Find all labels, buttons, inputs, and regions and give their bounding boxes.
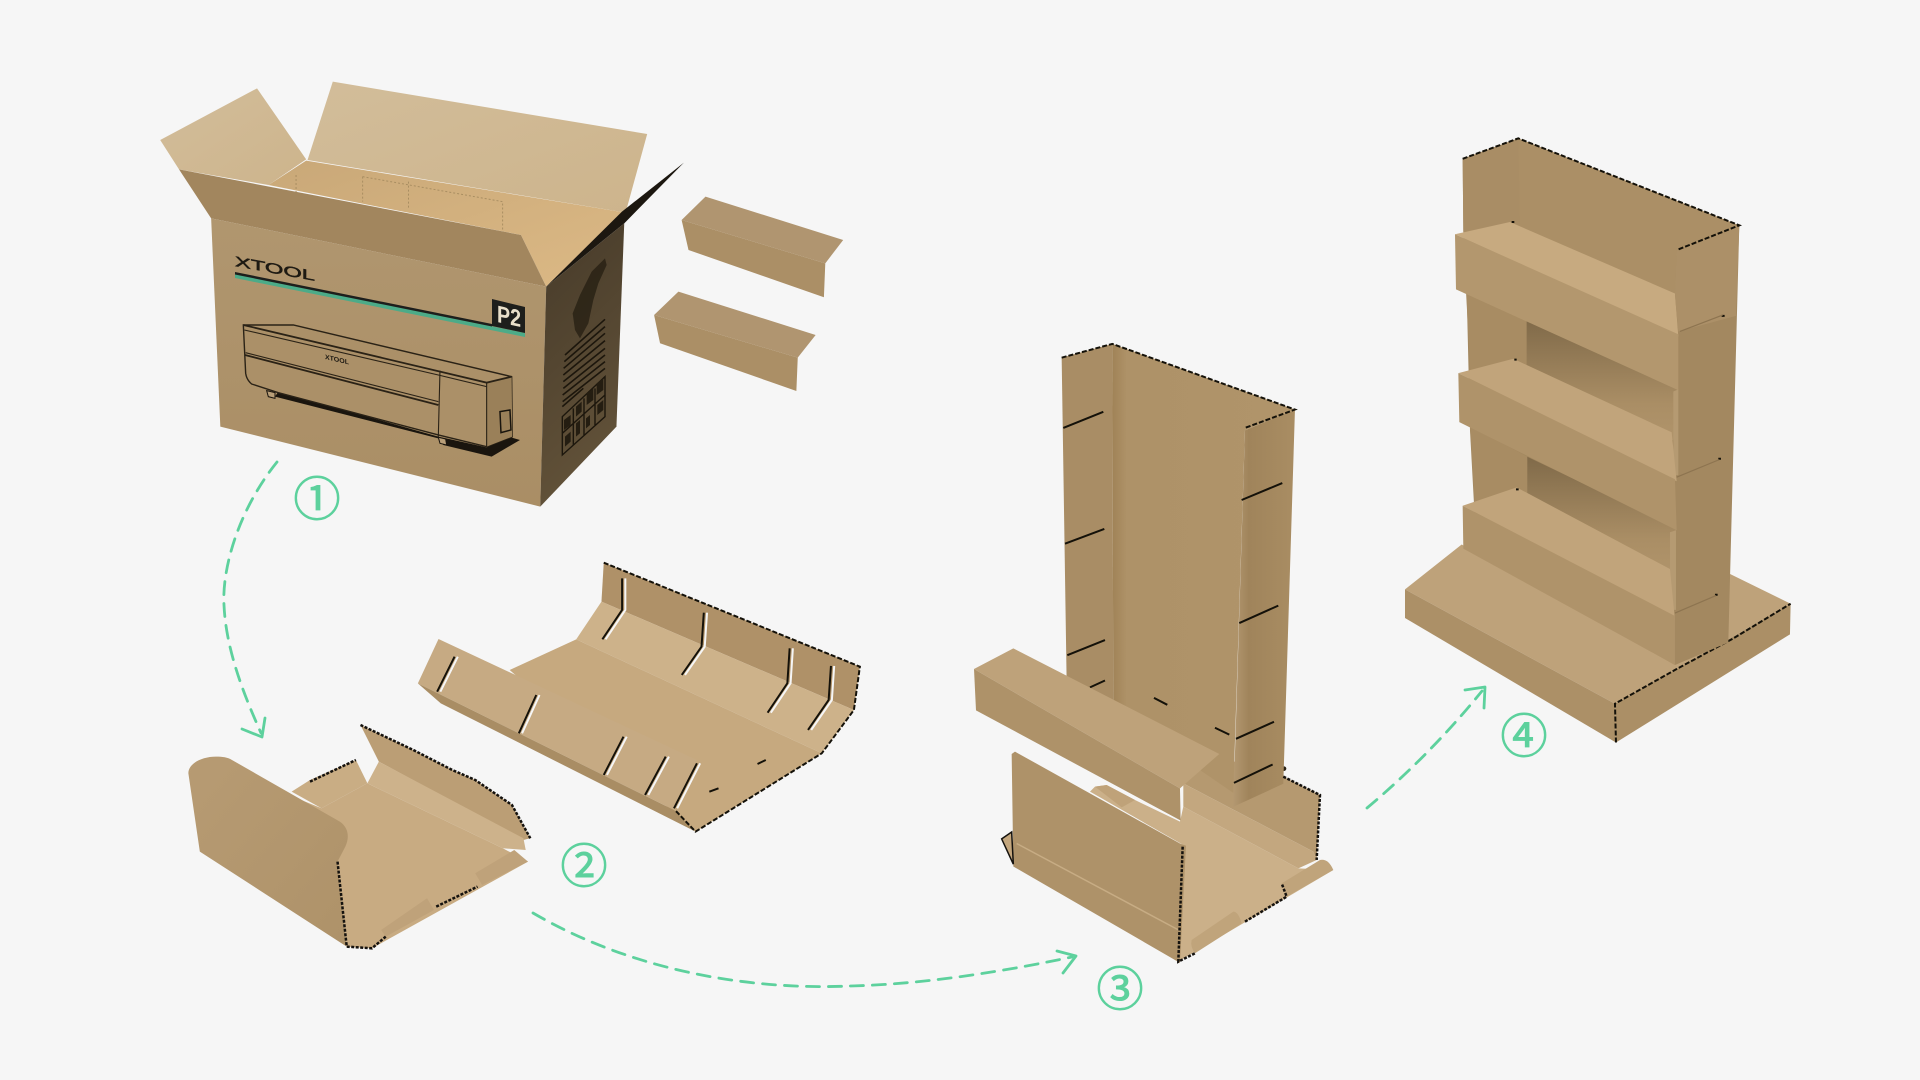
- arrow head: [1465, 687, 1485, 708]
- back panel low: [1527, 457, 1677, 575]
- tray tabs and edges: [1178, 777, 1333, 962]
- step 4: finished shelf stand: [1405, 138, 1791, 743]
- step number 1: ①: [294, 473, 340, 526]
- lower guard front: [654, 315, 798, 391]
- printer feet: [267, 391, 447, 445]
- printer thin crease: [244, 330, 487, 387]
- upper guard top: [682, 197, 843, 263]
- box front face: [211, 218, 546, 507]
- step 3: insert being assembled: [974, 344, 1333, 963]
- side print text rows: [562, 319, 605, 407]
- shelf 1 top: [1455, 222, 1678, 336]
- right wall lower band: [367, 762, 526, 850]
- arrow head: [1057, 951, 1076, 973]
- base right: [1615, 604, 1791, 743]
- tray back wall: [601, 563, 860, 710]
- printer top crease: [243, 325, 512, 383]
- base top: [1405, 545, 1791, 704]
- printer mark: XTOOL: [325, 354, 349, 367]
- rear corner knob: [1282, 766, 1286, 771]
- left column low: [1470, 426, 1527, 508]
- tray floor: [285, 783, 528, 948]
- tray corrugated edges: [1178, 777, 1320, 962]
- tray base: [510, 639, 822, 832]
- side print icons: [564, 378, 603, 447]
- side print icon grid: [562, 377, 605, 455]
- box left inner flap: [160, 88, 306, 185]
- tray black edges: [604, 563, 860, 832]
- box front flap: [179, 169, 546, 287]
- step number 3: ③: [1096, 963, 1144, 1016]
- wing lip 2: [1673, 389, 1678, 475]
- tall piece corrugated edges: [1062, 344, 1295, 428]
- front tab A: [381, 898, 434, 937]
- shelf slots: [1512, 222, 1725, 595]
- interior crease marks: [296, 175, 503, 233]
- lower tray wall fold: [1017, 843, 1180, 931]
- printer module edges: [438, 371, 487, 447]
- front tab B: [475, 850, 528, 885]
- back panel mid: [1527, 320, 1677, 440]
- tall piece slits: [1063, 412, 1282, 783]
- printer line drawing: [243, 325, 520, 457]
- top corrugated edge: [1463, 138, 1739, 250]
- arrow: step 1 to 2: [224, 462, 277, 737]
- back panel top: [1518, 138, 1739, 302]
- back small wall: [292, 760, 367, 808]
- base front: [1405, 589, 1616, 743]
- step 2: flat insert (upper tray): [418, 563, 860, 832]
- rear backing: [1463, 138, 1739, 665]
- arrow line: [1367, 691, 1482, 808]
- tall piece and front pieces: [974, 344, 1295, 963]
- arrow line: [224, 462, 277, 733]
- left upright: [1463, 138, 1523, 238]
- step number 2: ②: [560, 840, 608, 893]
- box interior: [269, 161, 626, 287]
- wing lip 3: [1670, 530, 1676, 610]
- tab right: [1282, 860, 1333, 897]
- side print artwork: [573, 258, 607, 338]
- box right face: [540, 223, 624, 507]
- tab left: [1191, 912, 1242, 953]
- right wall upper flap: [360, 725, 530, 840]
- tray slanted panel: [576, 602, 854, 753]
- lower guard top: [654, 292, 816, 358]
- printer port: [500, 410, 511, 433]
- black band: [235, 272, 492, 326]
- logo underline: [235, 272, 525, 337]
- wing lip 1: [1675, 225, 1739, 331]
- tray wing underside: [418, 683, 696, 832]
- green band: [235, 274, 525, 337]
- box side print: [562, 258, 607, 455]
- arrow head: [242, 718, 265, 737]
- shelf 2 top: [1458, 359, 1677, 481]
- arrow line: [533, 913, 1072, 987]
- left wall: [188, 757, 348, 947]
- step number 4: ④: [1500, 710, 1548, 763]
- shelf 1 front: [1455, 234, 1678, 390]
- right wall upper: [1183, 753, 1320, 860]
- printer body: [243, 325, 512, 447]
- printer lower seam: [246, 353, 438, 402]
- upper guard front: [682, 220, 825, 297]
- box back flap: [308, 82, 647, 213]
- tray slit highlights: [440, 578, 834, 808]
- lower tray left corner: [1002, 832, 1013, 864]
- rear scrap: [1095, 785, 1135, 807]
- lower tray front wall: [1012, 752, 1186, 963]
- step 1: open shipping box: [160, 82, 684, 507]
- printer base shadow: [275, 392, 520, 457]
- shelf 3 front: [1463, 506, 1675, 665]
- box right thin flap: [546, 163, 684, 287]
- tall left wall: [1062, 344, 1113, 710]
- printer lid seam: [245, 355, 438, 405]
- lower tray far section: [1090, 753, 1333, 962]
- tall right wing: [1233, 410, 1295, 807]
- corner guards beside box: [654, 197, 843, 391]
- P2 badge: [492, 299, 525, 333]
- slot seams: [1675, 315, 1723, 613]
- arrow: step 3 to 4: [1367, 687, 1485, 808]
- P2 text on badge: P2: [497, 301, 521, 333]
- tray slits: [437, 578, 831, 808]
- lower tray floor: [1090, 785, 1333, 962]
- shelf 2 front: [1458, 373, 1677, 530]
- tray left wing: [418, 639, 697, 810]
- bar top: [974, 648, 1219, 788]
- left column mid: [1466, 291, 1527, 377]
- XTOOL logo on box: XTOOL: [235, 253, 315, 284]
- printer right end shade: [487, 377, 512, 447]
- arrow: step 2 to 3: [533, 913, 1076, 987]
- corrugated edges: [310, 725, 530, 948]
- step 2: folded tray (lower): [188, 725, 530, 948]
- tall back panel: [1112, 344, 1295, 793]
- bar front: [974, 669, 1181, 821]
- right wall lower band: [1183, 783, 1317, 868]
- shelf 3 top: [1463, 487, 1675, 620]
- base corrugated edge: [1615, 604, 1791, 743]
